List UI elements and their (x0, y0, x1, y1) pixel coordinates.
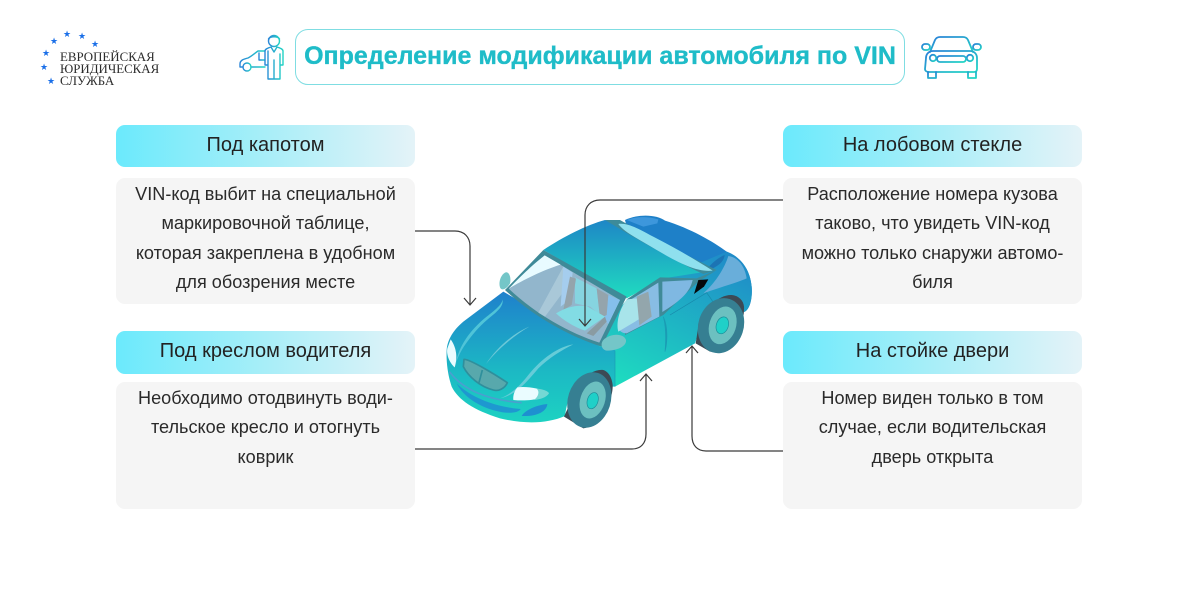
logo stars: ★ (47, 77, 55, 87)
heading: on the door pillar: На стойке двери (856, 340, 1009, 362)
side windows (618, 270, 717, 335)
title: Определение модификации автомобиля по VIN (304, 42, 896, 70)
side body (590, 252, 752, 387)
rear window (605, 220, 717, 274)
text: under the hood: VIN-код выбит на специальной (135, 184, 396, 204)
text: on the door pillar (783, 382, 1082, 509)
windshield (505, 250, 627, 347)
mirror right (602, 335, 626, 351)
text: on the windshield: таково, что увидеть VIN-код (815, 213, 1050, 233)
icon: mechanic with car (239, 34, 284, 80)
rear wheel (691, 292, 751, 359)
arrow: on the windshield (578, 199, 783, 327)
logo stars: ★ (78, 32, 86, 42)
door sill line (670, 293, 713, 315)
front wheel (560, 366, 618, 434)
rear quarter shadow (708, 255, 725, 271)
rear deck (625, 216, 752, 312)
text: on the door pillar: Номер виден только в том (821, 388, 1044, 408)
text: on the door pillar: дверь открыта (872, 447, 993, 467)
logo (40, 30, 159, 88)
heading: on the door pillar (783, 331, 1082, 374)
logo stars: ★ (91, 40, 99, 50)
front body and hood (447, 292, 615, 422)
text: on the windshield: Расположение номера кузова (807, 184, 1058, 204)
icon: car front (921, 36, 982, 79)
text: under the driver seat: тельское кресло и отогнуть (151, 417, 380, 437)
logo stars: ★ (50, 37, 58, 47)
arrow: under the hood (415, 230, 476, 306)
hood creases (456, 299, 573, 398)
mirror left (499, 272, 510, 289)
text: under the driver seat (116, 382, 415, 509)
logo stars: ★ (63, 30, 71, 40)
panel: under the driver seat (116, 331, 415, 509)
title (295, 29, 905, 85)
arrow: on the door pillar (686, 345, 783, 452)
text: on the windshield: можно только снаружи автомо- (802, 243, 1063, 263)
headlight left (447, 339, 456, 367)
door line (615, 317, 667, 387)
text: under the hood: для обозрения месте (176, 272, 355, 292)
text: under the hood: маркировочной таблице, (161, 213, 370, 233)
logo text: ЮРИДИЧЕСКАЯ (60, 62, 159, 76)
car illustration (446, 216, 752, 428)
headlight right (513, 387, 549, 400)
text: on the windshield (783, 178, 1082, 304)
heading: under the driver seat (116, 331, 415, 374)
heading: on the windshield: На лобовом стекле (843, 134, 1022, 156)
heading: under the hood: Под капотом (207, 134, 324, 156)
grille (463, 359, 507, 390)
heading: under the hood (116, 125, 415, 167)
panel: under the hood (116, 125, 415, 304)
rear quarter highlight (703, 256, 747, 293)
logo text: СЛУЖБА (60, 74, 114, 88)
text: under the driver seat: Необходимо отодвинуть води- (138, 388, 393, 408)
text: on the windshield: биля (912, 272, 953, 292)
roof (543, 220, 717, 298)
logo stars: ★ (42, 49, 50, 59)
arrow: under the driver seat (415, 373, 652, 450)
panel: on the door pillar (783, 331, 1082, 509)
bumper (449, 372, 547, 416)
rear spoiler highlight (627, 217, 658, 227)
logo text (60, 50, 159, 88)
heading: on the windshield (783, 125, 1082, 167)
panel: on the windshield (783, 125, 1082, 304)
heading: under the driver seat: Под креслом водителя (160, 340, 371, 362)
text: under the hood (116, 178, 415, 304)
logo text: ЕВРОПЕЙСКАЯ (60, 50, 155, 64)
text: on the door pillar: случае, если водительская (819, 417, 1046, 437)
logo stars (40, 30, 99, 87)
logo stars: ★ (40, 63, 48, 73)
text: under the hood: которая закреплена в удобном (136, 243, 395, 263)
text: under the driver seat: коврик (238, 447, 293, 467)
